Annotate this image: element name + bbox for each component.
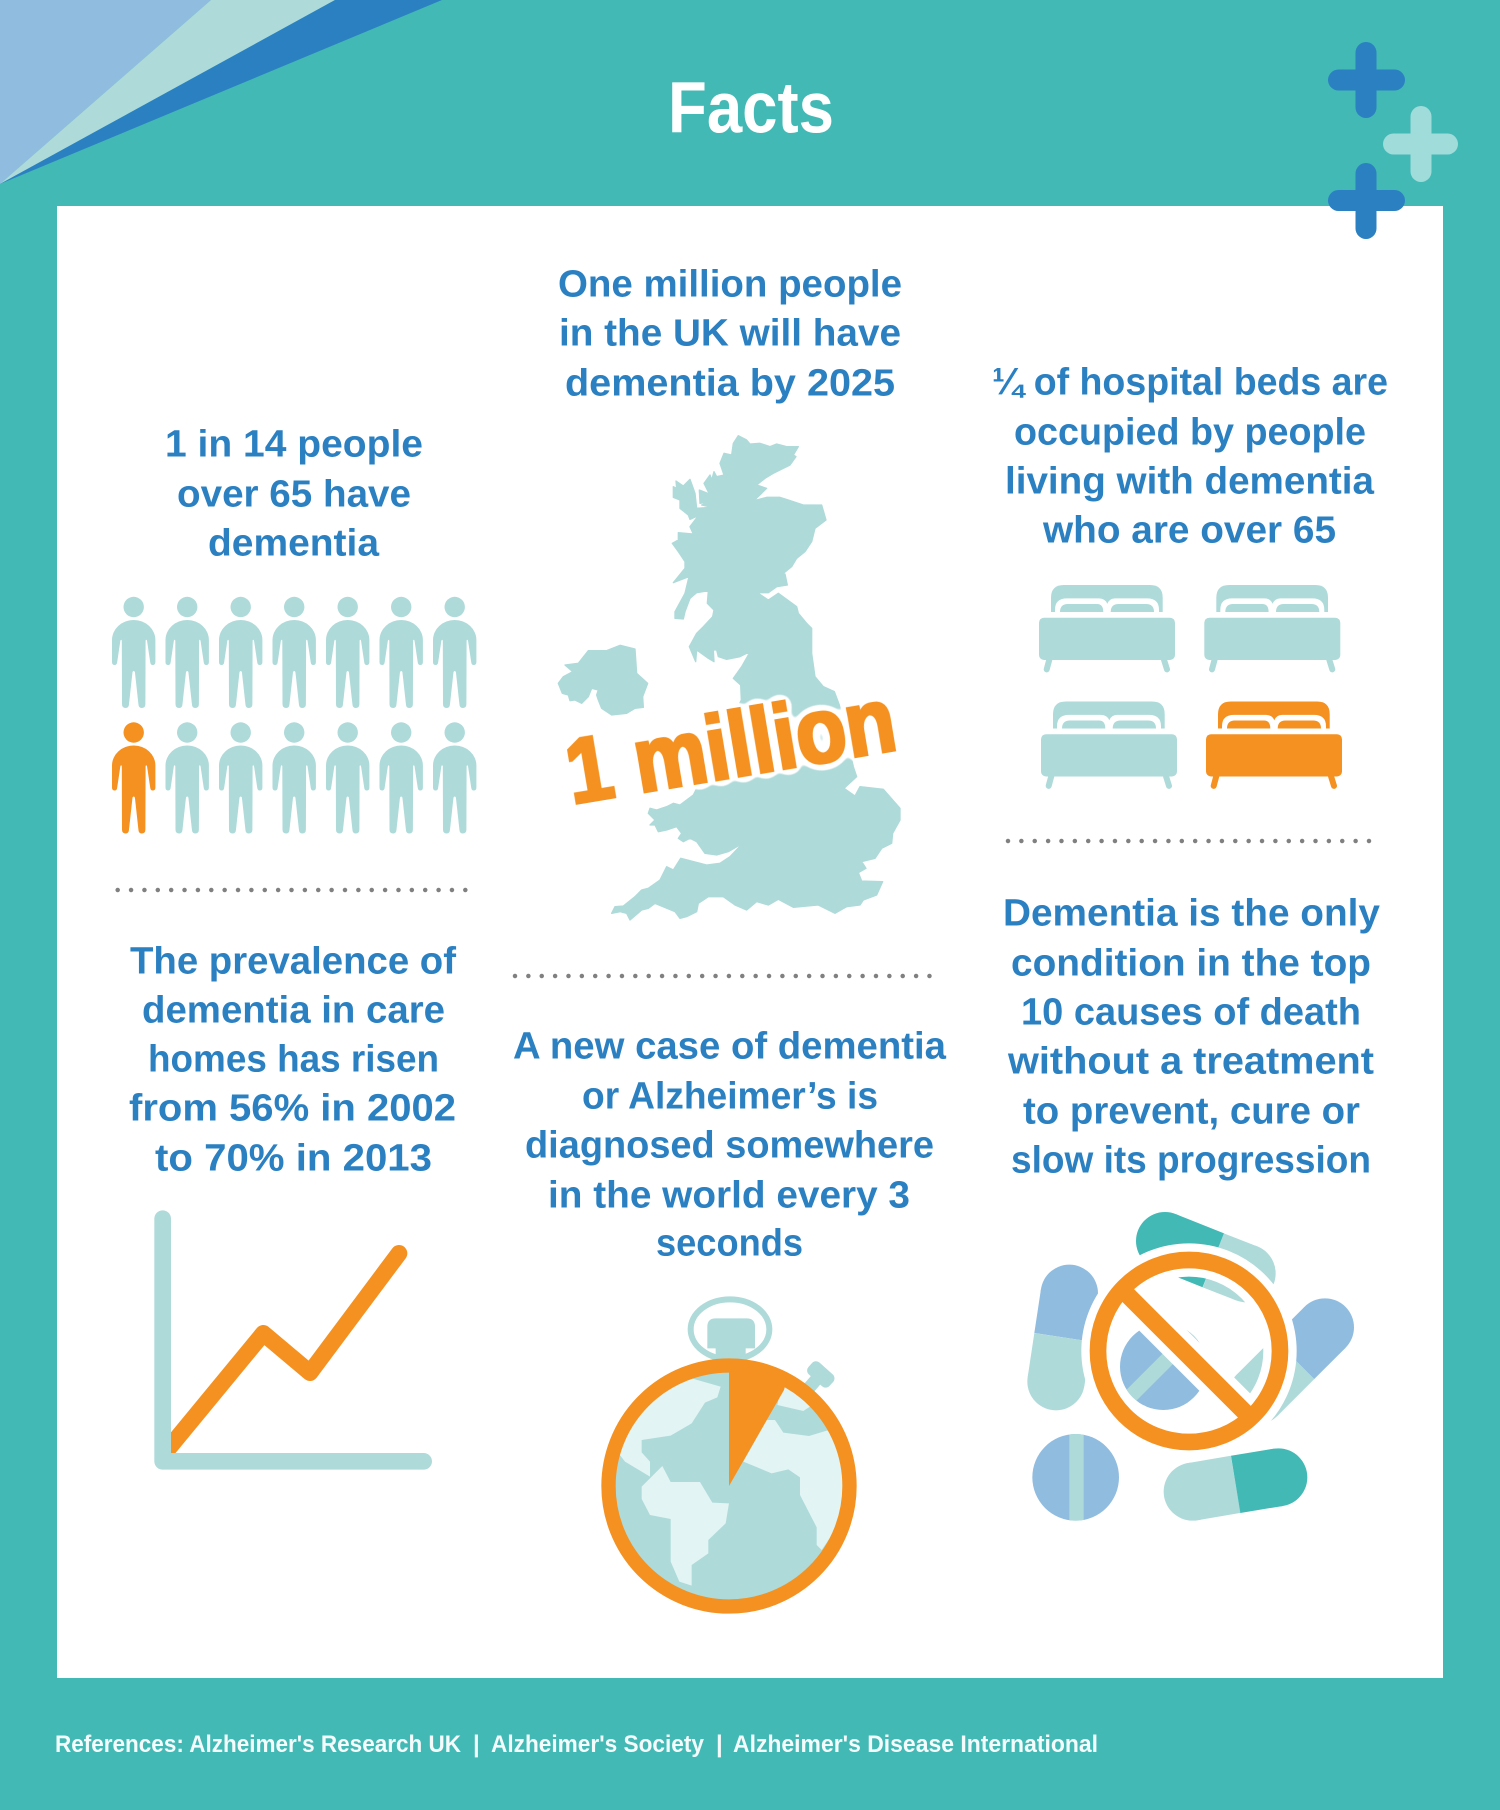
heading: hospital beds: living with dementia [1005,460,1375,502]
pill: bottom capsule [1164,1448,1307,1521]
heading: 1 in 14: over 65 have [177,474,411,516]
callout: 1 million: 1 million [558,668,903,824]
heading: new case: A new case of dementia [513,1026,947,1068]
icon: crossed out pills [1027,1212,1354,1525]
heading: only condition: without a treatment [1007,1040,1374,1082]
heading: only condition: slow its progression [1011,1140,1371,1182]
heading: 1 in 14: 1 in 14 people [165,424,423,466]
footer references: References: Alzheimer's Research UK [55,1731,462,1758]
heading: only condition: condition in the top [1011,942,1371,984]
footer references: | [473,1731,480,1758]
heading: hospital beds [992,362,1388,552]
panel: 1 in 14 people [112,424,476,834]
map: United Kingdom [558,436,900,920]
heading: 1 in 14 [165,424,423,564]
heading: new case: or Alzheimer’s is [582,1076,878,1118]
pill: top capsule [1136,1212,1276,1302]
heading: 1 in 14: dementia [208,522,380,564]
heading: hospital beds: who are over 65 [1042,510,1336,552]
line chart [163,1219,424,1461]
panel: new case every 3 seconds [513,1026,947,1606]
footer references [55,1731,1098,1758]
panel: no treatment [1003,892,1380,1525]
heading: new case [513,1026,947,1264]
heading: new case: diagnosed somewhere [525,1124,934,1166]
panel: hospital beds [992,362,1388,786]
icon: stopwatch globe [608,1299,849,1606]
heading: one million: in the UK will have [559,312,901,354]
footer references: | [716,1731,723,1758]
heading: only condition [1003,892,1380,1182]
title: Facts [668,68,834,148]
heading: one million [558,264,902,404]
pill: right capsule [1228,1298,1354,1425]
heading: prevalence [129,940,456,1180]
heading: hospital beds: ¼ of hospital beds are [992,362,1388,404]
pill: left capsule [1027,1265,1098,1410]
footer references: Alzheimer's Disease International [733,1731,1098,1758]
heading: only condition: 10 causes of death [1021,992,1361,1034]
panel: one million people [558,264,903,920]
heading: only condition: Dementia is the only [1003,892,1380,934]
heading: prevalence: dementia in care [142,990,445,1032]
heading: hospital beds: occupied by people [1014,412,1366,454]
heading: only condition: to prevent, cure or [1023,1090,1360,1132]
pill: bottom left tablet [1032,1430,1119,1525]
heading: new case: in the world every 3 [548,1174,910,1216]
heading: one million: One million people [558,264,902,306]
heading: new case: seconds [656,1222,803,1264]
heading: prevalence: from 56% in 2002 [129,1088,456,1130]
footer references: Alzheimer's Society [491,1731,705,1758]
icon: group of people [112,597,476,834]
icon: four beds [1039,585,1342,786]
heading: prevalence: The prevalence of [130,940,456,982]
icon: plus signs [1338,52,1448,228]
pill: inner tablet [1120,1330,1200,1410]
no symbol [1098,1260,1280,1442]
white content panel [57,206,1443,1678]
panel: care homes prevalence [129,940,456,1461]
heading: prevalence: to 70% in 2013 [155,1138,432,1180]
corner decoration [0,0,442,184]
heading: one million: dementia by 2025 [565,362,895,404]
heading: prevalence: homes has risen [148,1038,439,1080]
